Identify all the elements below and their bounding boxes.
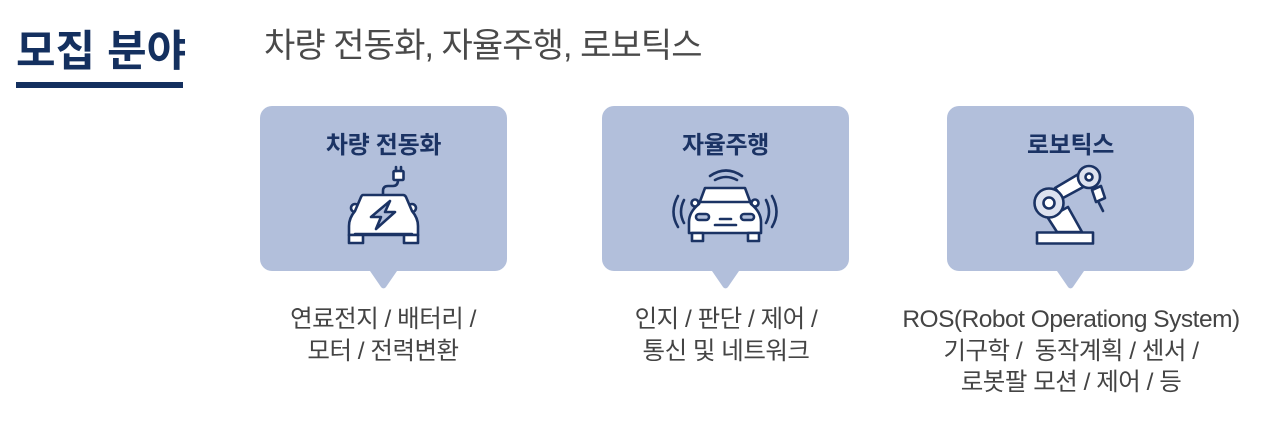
panel: vehicle electrification: [260, 106, 507, 288]
caption: robotics: 기구학 / 동작계획 / 센서 /: [943, 338, 1199, 364]
heading: robotics: 로보틱스: [1027, 132, 1114, 159]
caption: vehicle electrification: [290, 306, 476, 364]
title underline: [16, 82, 183, 88]
caption: vehicle electrification: 연료전지 / 배터리 /: [290, 306, 476, 333]
subtitle: 차량 전동화, 자율주행, 로보틱스: [264, 27, 702, 65]
caption: robotics: ROS(Robot Operationg System): [902, 306, 1240, 333]
caption: robotics: [902, 306, 1240, 396]
caption: autonomous driving: 인지 / 판단 / 제어 /: [635, 306, 817, 333]
caption: vehicle electrification: 모터 / 전력변환: [307, 338, 459, 364]
title: 모집 분야: [16, 28, 186, 76]
panel: robotics: [947, 106, 1194, 288]
panel: autonomous driving: [602, 106, 849, 288]
caption: autonomous driving: 통신 및 네트워크: [643, 338, 809, 364]
heading: vehicle electrification: 차량 전동화: [326, 132, 441, 159]
caption: autonomous driving: [635, 306, 818, 364]
caption: robotics: 로봇팔 모션 / 제어 / 등: [961, 369, 1181, 396]
heading: autonomous driving: 자율주행: [682, 132, 769, 159]
